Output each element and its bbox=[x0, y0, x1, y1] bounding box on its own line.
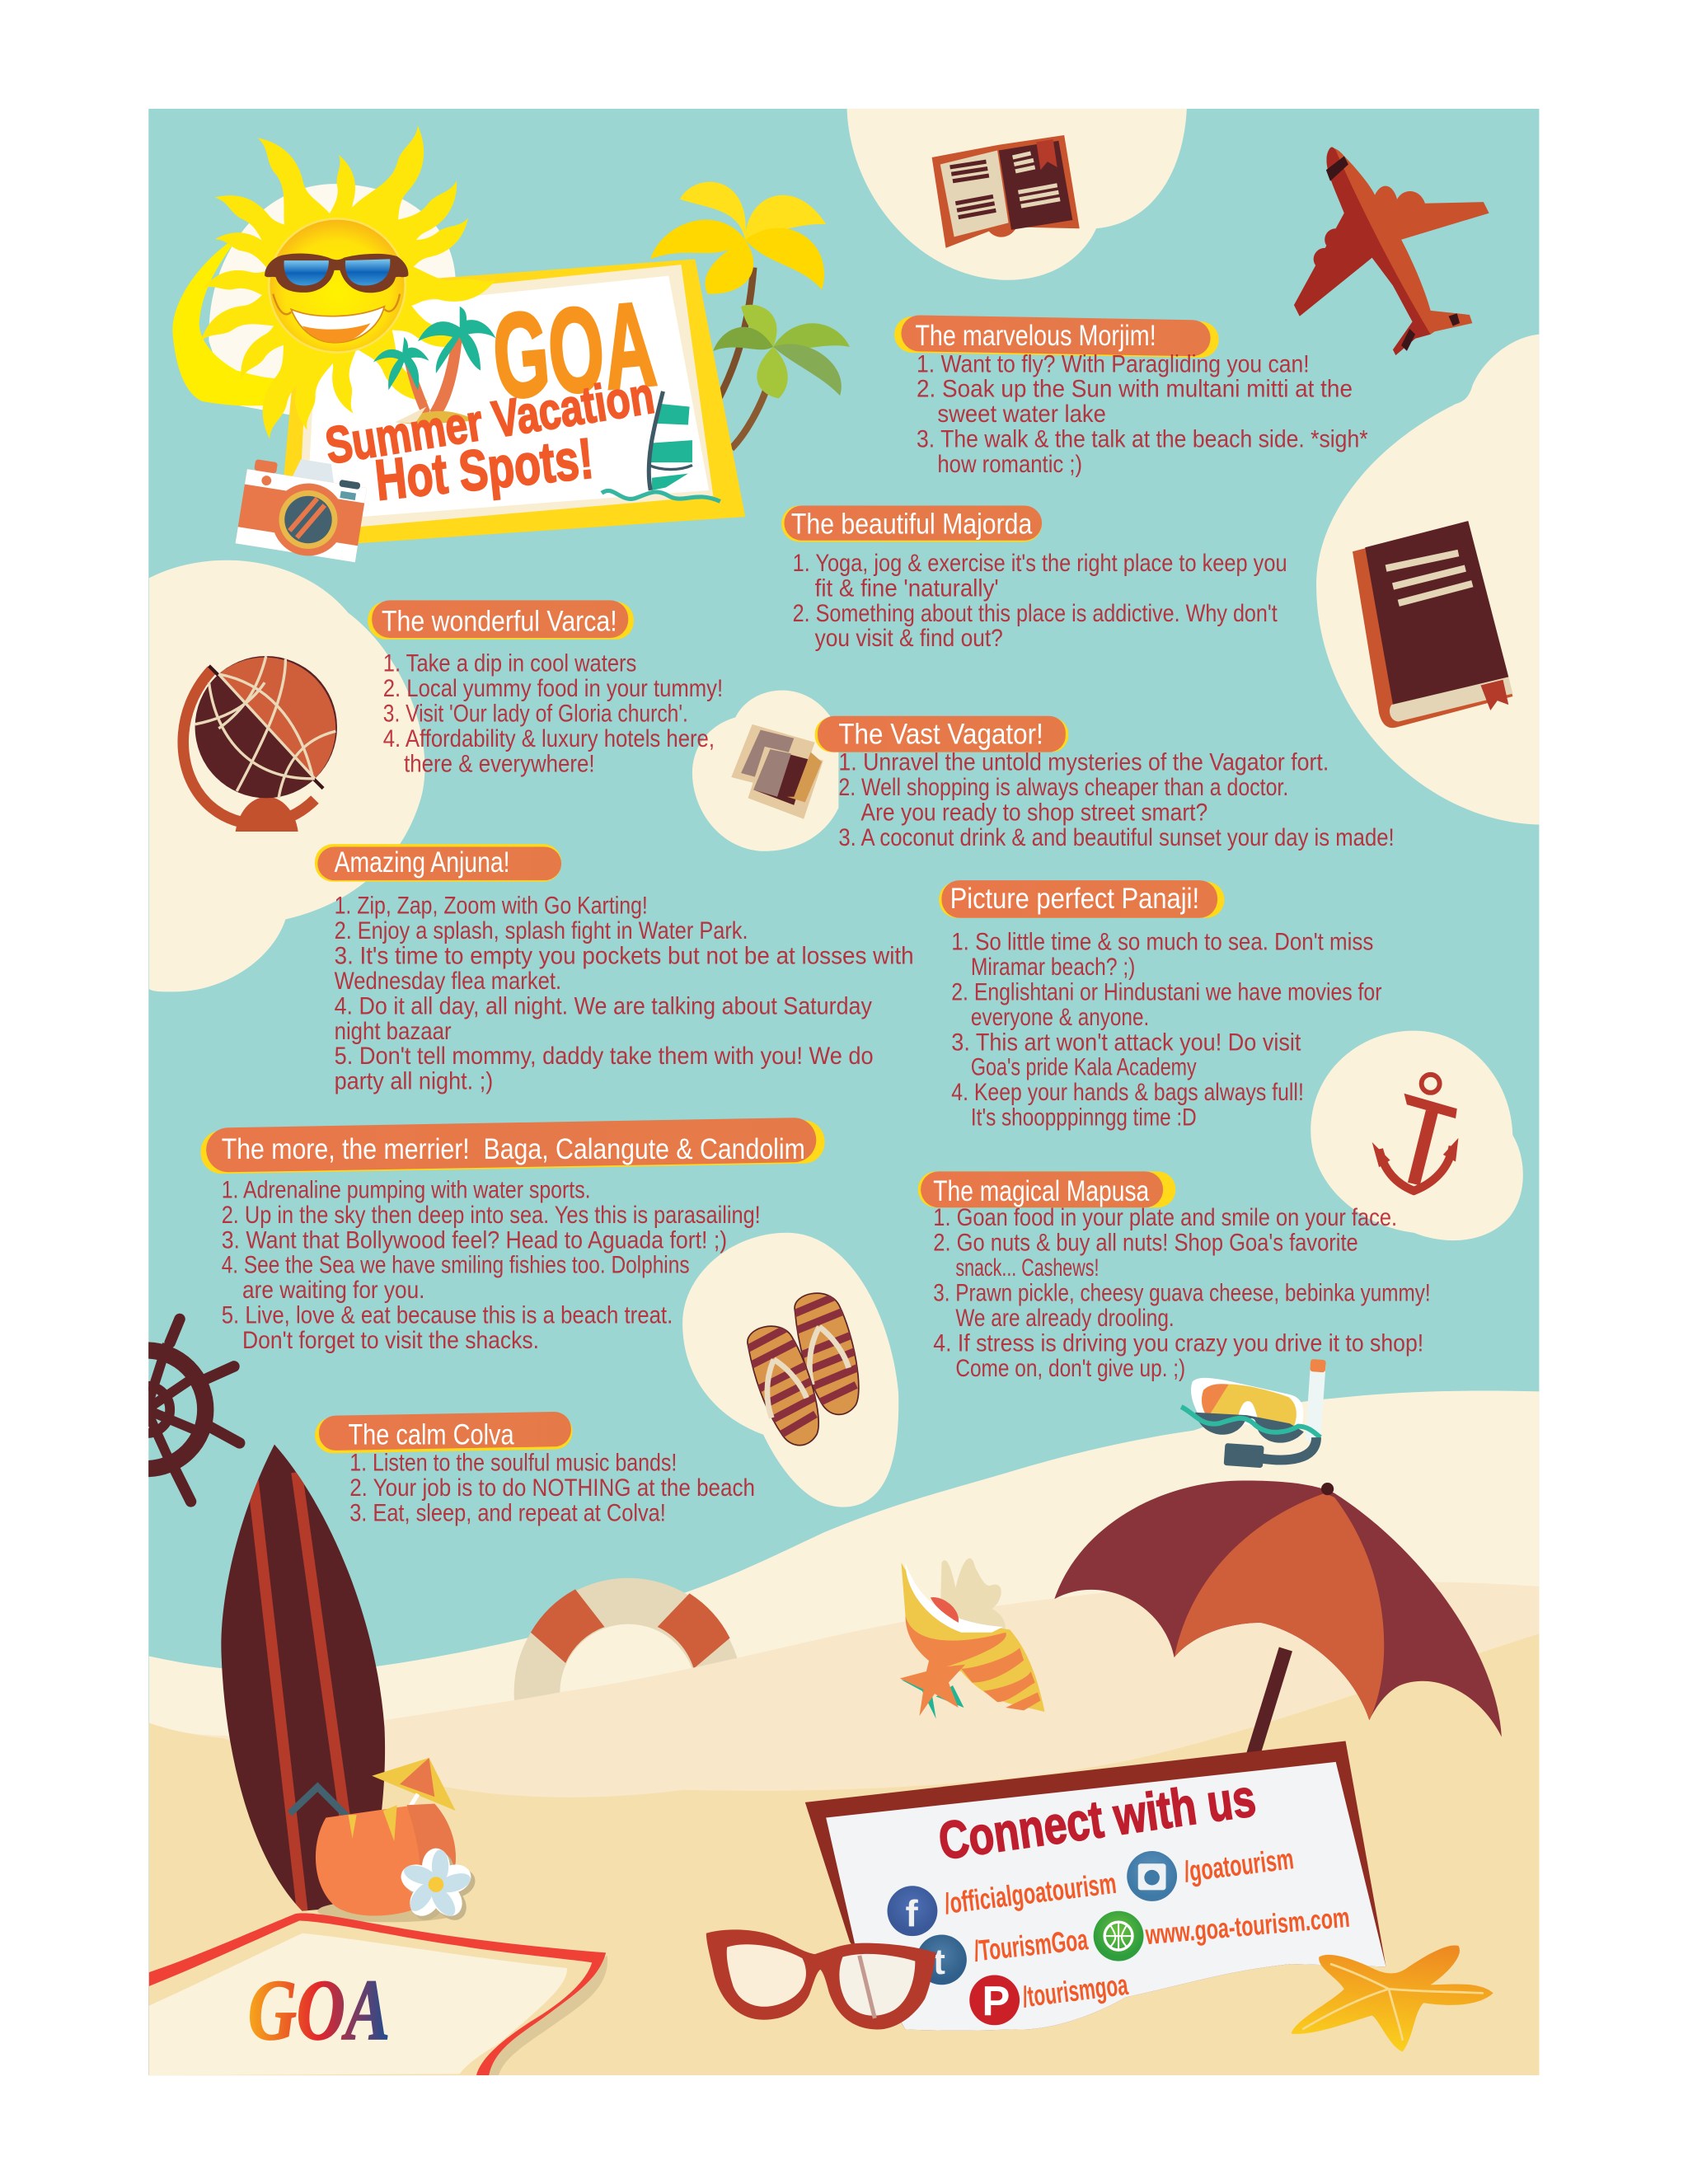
list: Mapusa: 2. Go nuts & buy all nuts! Shop Goa's favorite bbox=[933, 1230, 1358, 1257]
list: Anjuna bbox=[335, 893, 914, 1095]
heading pill: Baga Calangute Candolim: The more, the merrier! Baga, Calangute & Candolim bbox=[222, 1132, 805, 1165]
list: Varca: 1. Take a dip in cool waters bbox=[383, 650, 636, 677]
list: Baga Calangute Candolim: 1. Adrenaline pumping with water sports. bbox=[222, 1176, 591, 1203]
social text: tumblr: /TourismGoa bbox=[973, 1923, 1090, 1968]
list: Anjuna: 5. Don't tell mommy, daddy take them with you! We do bbox=[335, 1043, 874, 1070]
social text: facebook: /officialgoatourism bbox=[943, 1867, 1118, 1920]
list: Panaji: 3. This art won't attack you! Do visit bbox=[951, 1029, 1301, 1056]
list: Panaji: It's shoopppinngg time :D bbox=[971, 1104, 1197, 1132]
icon: seashell and starfish bbox=[900, 1558, 1045, 1719]
list: Panaji: 2. Englishtani or Hindustani we have movies for bbox=[951, 978, 1382, 1005]
list: Mapusa: 3. Prawn pickle, cheesy guava cheese, bebinka yummy! bbox=[933, 1280, 1431, 1307]
icon: flip-flops bbox=[738, 1287, 868, 1454]
social text: pinterest: /tourismgoa bbox=[1020, 1968, 1130, 2013]
list: Panaji: 1. So little time & so much to sea. Don't miss bbox=[951, 929, 1373, 956]
list: Vagator: Are you ready to shop street smart? bbox=[860, 799, 1207, 826]
panel: anchor cloud bbox=[1311, 1031, 1523, 1240]
list: Majorda bbox=[793, 550, 1287, 652]
icon: coconut drink bbox=[290, 1758, 462, 1922]
social: facebook bbox=[888, 1886, 937, 1936]
list: Mapusa: 4. If stress is driving you crazy you drive it to shop! bbox=[933, 1329, 1423, 1357]
panel: book cloud bbox=[847, 109, 1187, 280]
list: Varca: 3. Visit 'Our lady of Gloria church'. bbox=[383, 700, 688, 727]
list: Vagator bbox=[838, 749, 1395, 851]
list: Varca: there & everywhere! bbox=[404, 750, 595, 777]
icon: anchor bbox=[1372, 1075, 1458, 1191]
title: GOA: GOA bbox=[488, 276, 660, 424]
list: Mapusa: snack... Cashews! bbox=[955, 1254, 1099, 1282]
beach: wet sand layer bbox=[148, 1391, 1540, 1986]
list: Majorda: 2. Something about this place is addictive. Why don't bbox=[793, 600, 1278, 627]
social: tumblr: t bbox=[933, 1942, 945, 1982]
list: Anjuna: 3. It's time to empty you pockets but not be at losses with bbox=[335, 943, 914, 970]
list: Panaji bbox=[951, 929, 1382, 1132]
list: Anjuna: night bazaar bbox=[335, 1018, 452, 1045]
list: Colva: 1. Listen to the soulful music bands! bbox=[349, 1450, 677, 1477]
list: Panaji: Goa's pride Kala Academy bbox=[971, 1054, 1197, 1081]
icon: sun backdrop cloud bbox=[209, 184, 456, 418]
list: Colva: 3. Eat, sleep, and repeat at Colva! bbox=[349, 1500, 666, 1527]
icon: photos bbox=[731, 724, 823, 819]
panel: photos cloud bbox=[692, 691, 838, 851]
list: Baga Calangute Candolim: 2. Up in the sky then deep into sea. Yes this is parasailing! bbox=[222, 1202, 761, 1229]
icon: starfish bbox=[1292, 1946, 1493, 2051]
list: Mapusa bbox=[933, 1204, 1431, 1382]
list: Vagator: 2. Well shopping is always cheaper than a doctor. bbox=[838, 774, 1288, 801]
beach: mid sand layer bbox=[148, 1582, 1540, 1986]
page panel bbox=[87, 109, 1539, 2075]
list: Anjuna: 2. Enjoy a splash, splash fight in Water Park. bbox=[335, 917, 748, 944]
heading pill: Panaji: Picture perfect Panaji! bbox=[950, 882, 1199, 915]
list: Baga Calangute Candolim: are waiting for you. bbox=[242, 1277, 424, 1304]
panel: globe cloud bbox=[149, 560, 424, 991]
icon: sun crescent bbox=[172, 230, 285, 405]
section: Panaji bbox=[939, 880, 1382, 1132]
icon: open book bbox=[932, 135, 1080, 248]
social text: instagram: /goatourism bbox=[1182, 1842, 1296, 1888]
title: summer vacation: Summer Vacation bbox=[321, 367, 658, 476]
list: Baga Calangute Candolim: 5. Live, love & eat because this is a beach treat. bbox=[222, 1302, 673, 1329]
list: Varca bbox=[383, 650, 723, 777]
list: Vagator: 1. Unravel the untold mysteries of the Vagator fort. bbox=[838, 749, 1329, 776]
icon: lifebuoy bbox=[514, 1577, 737, 1700]
section: Baga Calangute Candolim bbox=[200, 1118, 825, 1354]
heading pill: Baga Calangute Candolim bbox=[200, 1118, 825, 1174]
heading pill: Majorda: The beautiful Majorda bbox=[791, 507, 1033, 540]
logo: GOA script: GOA bbox=[248, 1962, 390, 2058]
list: Baga Calangute Candolim: Don't forget to visit the shacks. bbox=[242, 1327, 539, 1354]
social text: website: www.goa-tourism.com bbox=[1144, 1902, 1351, 1951]
sign board bbox=[805, 1741, 1386, 2031]
icon: green palm bbox=[713, 305, 850, 448]
icon: airplane bbox=[1294, 148, 1489, 355]
list: Anjuna: 1. Zip, Zap, Zoom with Go Karting! bbox=[335, 893, 648, 920]
section: Morjim bbox=[894, 315, 1368, 478]
heading pill: Colva bbox=[315, 1412, 573, 1454]
list: Varca: 4. Affordability & luxury hotels here, bbox=[383, 725, 715, 752]
heading pill: Morjim: The marvelous Morjim! bbox=[915, 319, 1156, 352]
list: Vagator: 3. A coconut drink & and beautiful sunset your day is made! bbox=[838, 824, 1395, 851]
icon: flower bbox=[397, 1849, 479, 1926]
list: Anjuna: Wednesday flea market. bbox=[335, 968, 561, 995]
heading pill: Varca: The wonderful Varca! bbox=[382, 605, 617, 638]
icon: snorkel mask bbox=[1181, 1359, 1326, 1468]
list: Baga Calangute Candolim: 4. See the Sea we have smiling fishies too. Dolphins bbox=[222, 1252, 690, 1279]
list: Anjuna: 4. Do it all day, all night. We are talking about Saturday bbox=[335, 992, 872, 1019]
list: Baga Calangute Candolim: 3. Want that Bollywood feel? Head to Aguada fort! ;) bbox=[222, 1226, 727, 1254]
section: Majorda bbox=[781, 506, 1287, 652]
list: Panaji: Miramar beach? ;) bbox=[971, 954, 1135, 981]
list: Morjim: 2. Soak up the Sun with multani mitti at the bbox=[917, 376, 1353, 403]
list: Mapusa: Come on, don't give up. ;) bbox=[955, 1355, 1185, 1382]
heading pill: Colva: The calm Colva bbox=[349, 1418, 514, 1451]
list: Mapusa: We are already drooling. bbox=[955, 1305, 1175, 1332]
list: Majorda: 1. Yoga, jog & exercise it's the right place to keep you bbox=[793, 550, 1287, 577]
heading pill: Vagator: The Vast Vagator! bbox=[838, 717, 1043, 750]
list: Colva bbox=[349, 1450, 755, 1527]
towel bbox=[149, 1913, 607, 2075]
social: facebook: f bbox=[906, 1892, 919, 1934]
social: pinterest: P bbox=[982, 1977, 1010, 2024]
social: instagram bbox=[1127, 1851, 1177, 1901]
list: Panaji: 4. Keep your hands & bags always full! bbox=[951, 1079, 1304, 1106]
list: Baga Calangute Candolim bbox=[222, 1176, 761, 1354]
sign frame bbox=[277, 259, 745, 549]
icon: notebook bbox=[1353, 521, 1512, 728]
icon: red glasses bbox=[706, 1929, 936, 2030]
heading pill: Morjim bbox=[894, 315, 1219, 358]
social: website bbox=[1094, 1911, 1143, 1961]
icon: surfboard bbox=[221, 1445, 385, 1911]
panel: title sign bbox=[172, 118, 850, 564]
list: Morjim: how romantic ;) bbox=[937, 451, 1082, 478]
list: Colva: 2. Your job is to do NOTHING at the beach bbox=[349, 1474, 755, 1502]
social: pinterest bbox=[969, 1975, 1020, 2025]
icon: beach umbrella bbox=[1054, 1480, 1502, 1758]
connect sign bbox=[805, 1741, 1386, 2031]
section: Mapusa bbox=[918, 1171, 1431, 1382]
section: Anjuna bbox=[315, 844, 914, 1095]
icon: globe bbox=[183, 656, 337, 832]
list: Anjuna: party all night. ;) bbox=[335, 1068, 493, 1095]
icon: ship wheel bbox=[87, 1319, 240, 1502]
sea background bbox=[148, 109, 1539, 2075]
list: Varca: 2. Local yummy food in your tummy! bbox=[383, 675, 723, 702]
section: Varca bbox=[368, 600, 723, 777]
panel: notebook cloud bbox=[1316, 335, 1539, 825]
heading pill: Mapusa: The magical Mapusa bbox=[933, 1174, 1149, 1207]
title: hot spots: Hot Spots! bbox=[372, 425, 596, 513]
social: tumblr bbox=[917, 1934, 967, 1985]
list: Majorda: you visit & find out? bbox=[815, 625, 1003, 652]
icon: windsurf sail bbox=[602, 391, 720, 501]
beach: dry sand layer bbox=[149, 1633, 1539, 2075]
list: Morjim: 3. The walk & the talk at the beach side. *sigh* bbox=[917, 426, 1368, 453]
icon: teal palm trees bbox=[373, 307, 496, 424]
list: Morjim: sweet water lake bbox=[937, 401, 1106, 428]
section: Colva bbox=[315, 1412, 755, 1527]
list: Majorda: fit & fine 'naturally' bbox=[815, 574, 999, 602]
list: Panaji: everyone & anyone. bbox=[971, 1004, 1149, 1031]
section: Vagator bbox=[815, 716, 1395, 851]
heading pill: Anjuna: Amazing Anjuna! bbox=[335, 846, 510, 879]
icon: sun bbox=[190, 118, 497, 446]
list: Morjim: 1. Want to fly? With Paragliding you can! bbox=[917, 350, 1310, 377]
icon: camera bbox=[235, 451, 370, 564]
list: Mapusa: 1. Goan food in your plate and smile on your face. bbox=[933, 1204, 1397, 1231]
icon: yellow palm bbox=[650, 182, 826, 401]
heading: connect with us: Connect with us bbox=[935, 1768, 1259, 1871]
list: Morjim bbox=[917, 350, 1368, 478]
panel: flip-flop cloud bbox=[682, 1233, 898, 1507]
